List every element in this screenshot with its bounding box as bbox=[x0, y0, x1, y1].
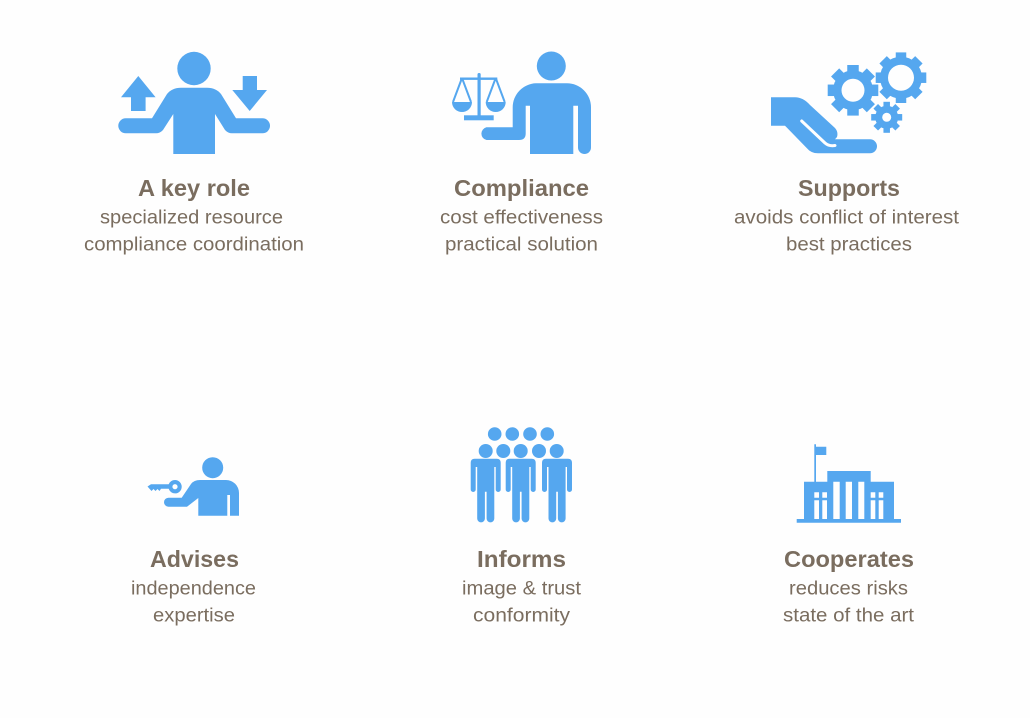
text line: practical solution bbox=[445, 234, 598, 256]
text line: reduces risks bbox=[789, 578, 908, 600]
icon: person holding key bbox=[148, 457, 239, 516]
panel: informs bbox=[462, 427, 582, 626]
text line: conformity bbox=[473, 606, 571, 626]
heading: A key role bbox=[138, 175, 250, 201]
text line: expertise bbox=[153, 606, 235, 626]
text line: specialized resource bbox=[100, 208, 283, 228]
panel: compliance bbox=[440, 52, 603, 256]
heading: Cooperates bbox=[784, 546, 914, 572]
panel: supports bbox=[734, 52, 960, 256]
icon: building with flag bbox=[797, 444, 901, 523]
heading: Informs bbox=[477, 546, 566, 572]
icon: person with scales bbox=[452, 52, 591, 154]
panel: a key role bbox=[84, 52, 304, 255]
icon: crowd of people bbox=[471, 427, 572, 522]
panel: cooperates bbox=[783, 444, 915, 626]
heading: Advises bbox=[150, 546, 239, 572]
icon: person balancing up and down arrows bbox=[118, 52, 270, 154]
heading: Supports bbox=[798, 175, 900, 201]
icon: hand holding gears bbox=[771, 52, 926, 153]
text line: state of the art bbox=[783, 606, 915, 626]
text line: compliance coordination bbox=[84, 234, 304, 256]
text line: image & trust bbox=[462, 578, 582, 600]
text line: best practices bbox=[786, 234, 912, 256]
heading: Compliance bbox=[454, 175, 589, 201]
text line: avoids conflict of interest bbox=[734, 208, 960, 228]
text line: independence bbox=[131, 578, 256, 600]
text line: cost effectiveness bbox=[440, 208, 603, 228]
panel: advises bbox=[131, 457, 256, 626]
